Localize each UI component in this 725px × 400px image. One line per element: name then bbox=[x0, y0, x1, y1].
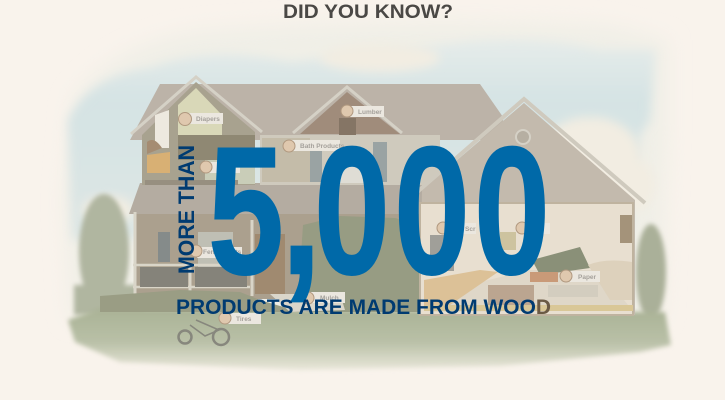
label: screens bbox=[437, 222, 476, 234]
big number: 0 bbox=[314, 109, 390, 313]
lawn bbox=[68, 308, 671, 370]
big number: 5 bbox=[208, 109, 284, 313]
vertical text: more than: MORE THAN bbox=[174, 145, 199, 274]
label: paper: Paper bbox=[578, 274, 597, 281]
label: lumber: Lumber bbox=[358, 109, 382, 116]
label: screens: Scr bbox=[465, 226, 476, 233]
porch door and windows bbox=[158, 232, 170, 262]
label: diapers: Diapers bbox=[196, 116, 220, 123]
title: DID YOU KNOW? bbox=[283, 2, 453, 23]
main roof bbox=[130, 84, 503, 140]
porch railing bbox=[133, 265, 250, 287]
label: interior marker bbox=[516, 222, 550, 234]
house illustration bbox=[100, 77, 645, 315]
living room cutaway bbox=[420, 203, 633, 315]
second floor windows bbox=[310, 142, 322, 182]
subtitle: PRODUCTS ARE MADE FROM WOOD bbox=[176, 296, 551, 319]
porch shrubs bbox=[100, 290, 300, 312]
label: upstairs wood marker bbox=[200, 161, 240, 173]
porch wall bbox=[135, 214, 425, 299]
label: fence posts bbox=[190, 245, 242, 258]
label: bath products bbox=[283, 140, 345, 152]
lower roof band bbox=[129, 183, 430, 214]
bathroom cutaway bbox=[262, 138, 310, 182]
label: tires: Tires bbox=[236, 316, 252, 323]
label: mulch: Mulch bbox=[320, 295, 339, 302]
big number: , bbox=[281, 109, 321, 312]
background trees bbox=[74, 194, 666, 320]
big number bbox=[208, 109, 550, 313]
second floor wall bbox=[260, 135, 440, 185]
walkway bbox=[270, 294, 345, 312]
label: bath products: Bath Products bbox=[300, 143, 345, 150]
right gable wall bbox=[420, 103, 635, 315]
watercolor sky bbox=[64, 21, 668, 320]
right gable trim bbox=[400, 99, 645, 207]
big number: 0 bbox=[394, 109, 470, 313]
round gable window bbox=[516, 130, 530, 144]
clouds bbox=[82, 44, 655, 224]
middle dormer bbox=[293, 87, 402, 137]
label: diapers bbox=[178, 112, 223, 126]
label: mulch bbox=[302, 292, 345, 304]
product labels bbox=[178, 105, 600, 324]
big number: 0 bbox=[474, 109, 550, 313]
label: paper bbox=[560, 270, 600, 282]
label: lumber bbox=[341, 105, 384, 117]
label: fence posts: Fence Posts bbox=[203, 249, 242, 256]
left attic cutaway bbox=[142, 82, 255, 185]
left gable trim bbox=[131, 77, 262, 134]
bicycle bbox=[178, 320, 229, 345]
label: tires bbox=[219, 312, 261, 324]
